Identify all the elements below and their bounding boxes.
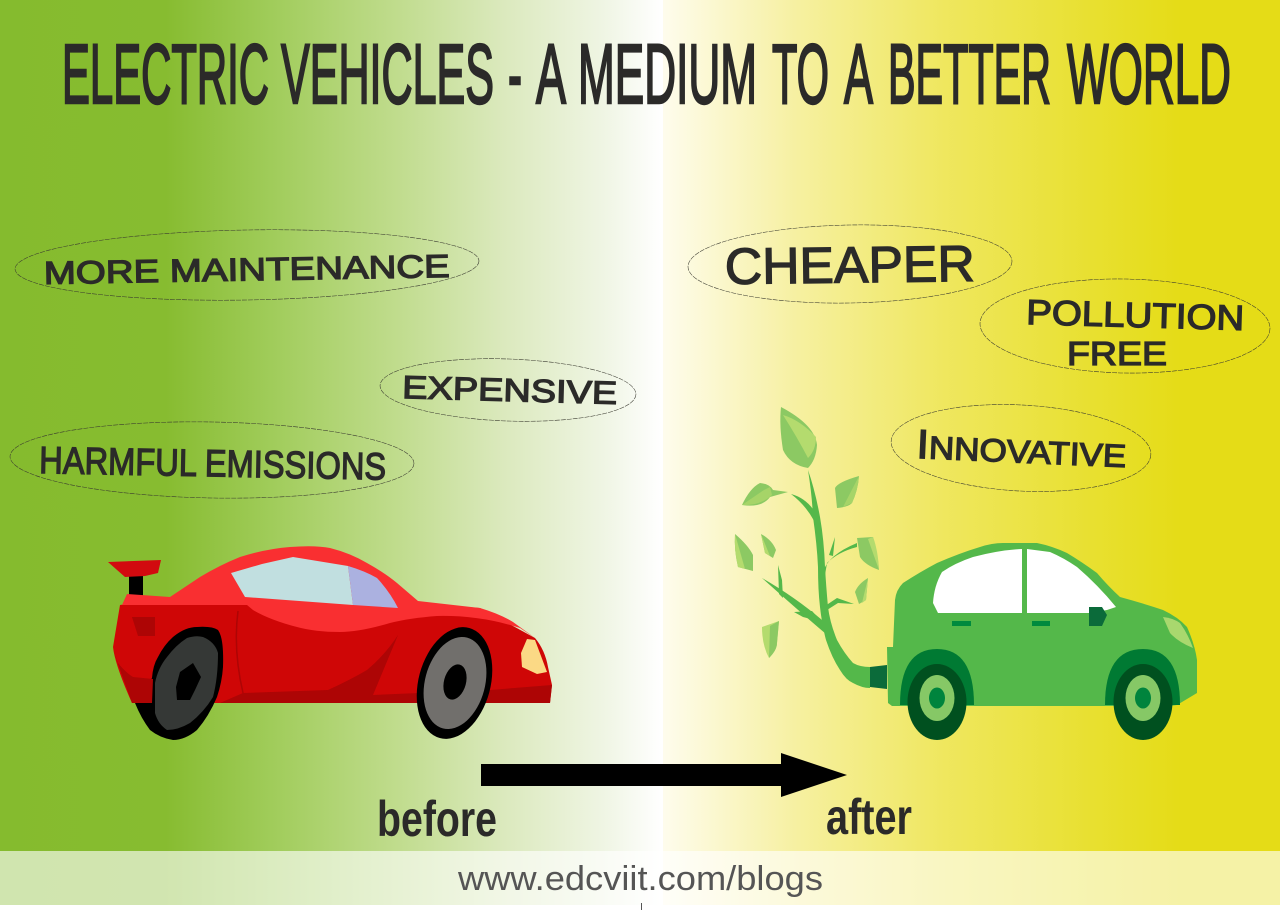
car body [887,543,1197,706]
label: after: after [826,789,912,845]
title: - [508,27,522,121]
rear window [933,549,1022,613]
rear wheel [135,627,223,740]
callout: expensive [379,355,637,425]
background: right yellow gradient [663,0,1280,910]
footer band [0,851,1280,905]
callout: more maintenance: MORE MAINTENANCE [43,248,450,291]
background: left green gradient [0,0,663,910]
title: ELECTRIC [62,27,269,121]
icon: red petrol car [108,546,552,747]
callout: harmful emissions: HARMFUL EMISSIONS [39,440,387,489]
icon: green electric car [887,543,1197,740]
label: before: before [377,791,497,847]
callout: harmful emissions [9,418,415,502]
door handles [952,621,1050,626]
callout: cheaper [687,222,1013,306]
callout: pollution free: POLLUTION [1026,293,1245,338]
callout: innovative [889,398,1153,498]
exhaust pipe [870,665,887,689]
headlight [521,639,547,674]
front wheel [1105,649,1180,740]
title: A [536,27,566,121]
stem and branches [762,470,870,688]
car body [113,590,552,703]
leaves [735,407,879,658]
front window [1027,549,1116,613]
callout: innovative: INNOVATIVE [916,421,1127,476]
spoiler [108,560,161,596]
callout: more maintenance [14,226,480,304]
title: MEDIUM [578,27,757,121]
callout: pollution free [979,276,1271,376]
door mirror [1089,607,1107,626]
front wheel [405,619,504,747]
title: A [844,27,873,121]
callout: pollution free: FREE [1067,335,1167,372]
title: BETTER [888,27,1051,121]
callout: cheaper: CHEAPER [724,235,975,295]
arrow: before to after [481,753,847,797]
title: TO [772,27,829,121]
rear wheel [900,649,974,740]
headlight [1163,617,1193,648]
rear lower bumper [113,650,153,703]
title [62,27,1231,121]
windows [231,557,353,605]
callout: expensive: EXPENSIVE [402,369,618,411]
lower shading [220,635,552,703]
title: VEHICLES [281,27,494,121]
icon: plant growing from exhaust [735,407,887,689]
footer url: www.edcviit.com/blogs [457,860,823,898]
